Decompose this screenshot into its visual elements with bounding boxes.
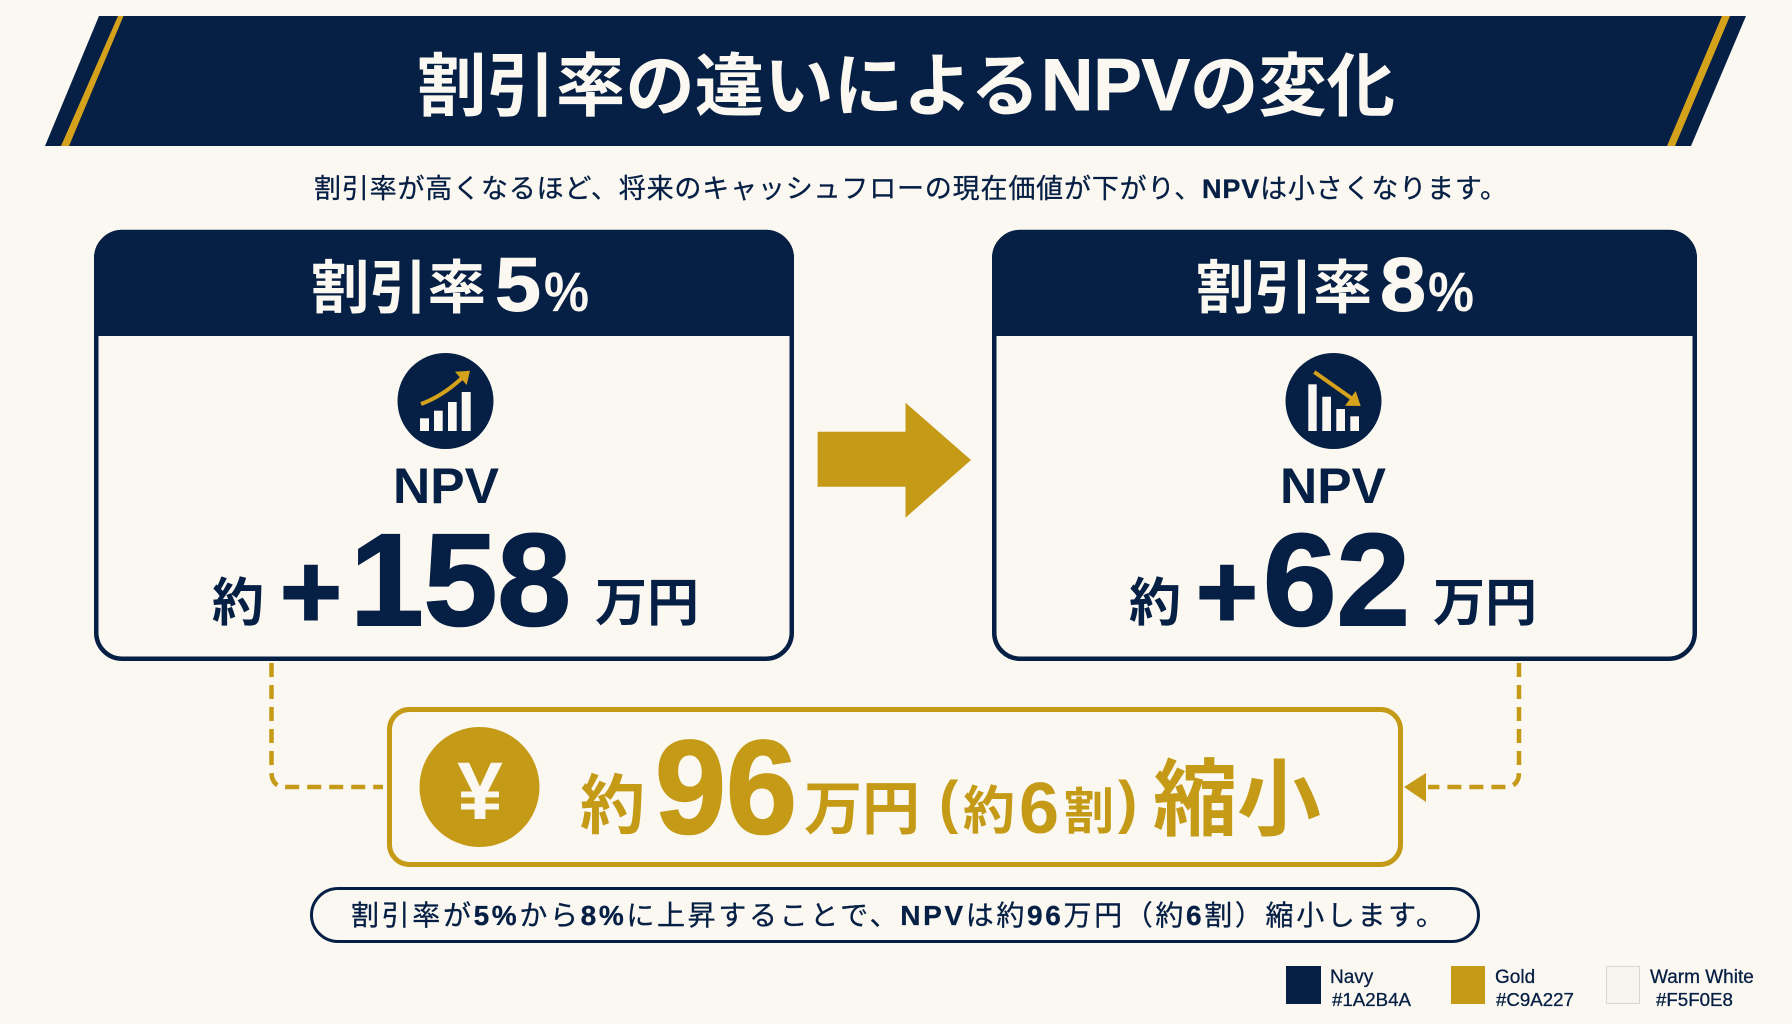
NPV value: about +62: 62 [1263,506,1410,653]
legend: warm white: Warm White [1650,967,1754,988]
summary pill [312,888,1478,942]
title banner: NPV [1041,45,1190,126]
result text: 万円 [804,777,920,842]
legend: navy: Navy [1330,967,1374,988]
panel header: 8% [992,230,1697,336]
legend: gold: Gold [1495,967,1535,988]
dashed connector: left panel to result [272,663,383,787]
result text [580,714,1321,862]
NPV value: about +62: 約 [1129,575,1181,633]
NPV value: about +158: 約 [212,575,264,633]
panel: discount rate 5% [94,230,794,659]
panel header: 5%: 割引率 [311,256,486,321]
result text: 割 [1064,784,1114,840]
legend: navy: #1A2B4A [1332,989,1412,1010]
legend: gold: #C9A227 [1496,989,1574,1010]
arrow: 5% to 8% [818,403,971,518]
NPV value: about +62: 万円 [1433,575,1537,633]
NPV value: about +158: 万円 [595,575,699,633]
panel header: 8%: 8 [1380,243,1426,328]
legend: navy [1286,966,1412,1010]
icon: yen coin [420,727,540,847]
icon: falling bar chart [1286,353,1382,449]
result text: ( [939,770,959,835]
result text: 約 [580,769,645,842]
result text: 96 [655,714,797,862]
summary pill: 割引率が5%から8%に上昇することで、NPVは約96万円（約6割）縮小します。 [351,900,1444,931]
NPV value: about +62: + [1196,533,1258,651]
subtitle: 割引率が高くなるほど、将来のキャッシュフローの現在価値が下がり、NPVは小さくなります。 [314,174,1507,204]
dashed connector: right panel to result [1404,663,1519,802]
NPV label: NPV [1280,458,1387,514]
panel header: 5% [94,230,794,336]
panel header: 5%: % [544,260,589,323]
result text: 縮小 [1153,753,1321,847]
panel: discount rate 8% [992,230,1697,659]
legend: warm white: #F5F0E8 [1656,989,1733,1010]
legend [1286,966,1754,1010]
NPV value: about +158: + [280,533,342,651]
panel header: 8%: 割引率 [1196,256,1372,321]
NPV label: NPV [393,458,500,514]
NPV value: about +158 [212,506,699,653]
title banner: 割引率の違いによる [417,48,1040,125]
panel: result callout [390,710,1400,864]
result text: 約 [963,783,1015,841]
panel header: 5%: 5 [495,243,541,328]
icon: yen coin: ¥ [457,746,503,837]
legend: gold [1451,966,1574,1010]
icon: rising bar chart [398,353,494,449]
NPV value: about +62 [1129,506,1537,653]
NPV value: about +158: 158 [350,506,571,653]
title banner [45,16,1746,146]
legend: warm white [1606,966,1754,1010]
result text: 6 [1019,769,1059,849]
result text: ) [1118,770,1137,835]
title banner: の変化 [1190,48,1395,125]
panel header: 8%: % [1428,260,1474,323]
